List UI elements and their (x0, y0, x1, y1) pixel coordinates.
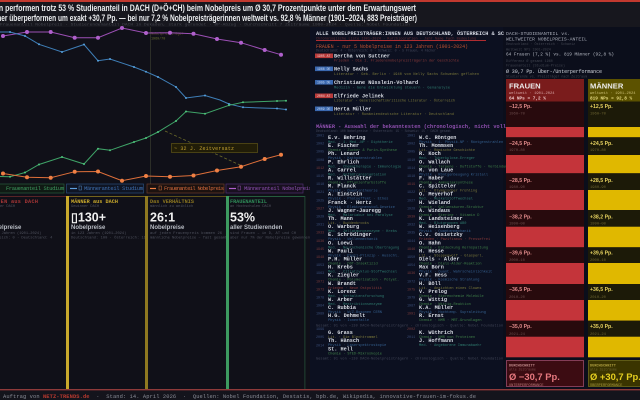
laureates: right column: 1914 (407, 167, 415, 171)
laureates: left column: M. Planck (328, 184, 356, 190)
summary: Frauen average: Ø −30,7 Pp. (509, 371, 560, 382)
series: Frauenanteil Nobelpreis (1, 153, 283, 183)
subheading: Männer counts: Deutschland: 100 Nobelpreise · Österreich: 15 · Schweiz: 15 · DACH gesamt (316, 129, 451, 133)
card: Frauenanteil: an Hochschulen DACH (230, 204, 271, 209)
column: Männer: +36,5 Pp. (590, 287, 613, 293)
laureates: left column: 1984 (316, 305, 324, 309)
laureates: right column: H. Böll (419, 281, 441, 287)
column: Männer: 2021–24 (590, 333, 607, 337)
laureates: right column: C.v. Ossietzky (419, 232, 463, 238)
title band: Männer überperformen um exakt +30,7 Pp. — bei nur 7,2 % Nobelpreisträgerinnen weltweit vs. 92,8 % Männer (1901–2024, 883 Preisträger) (0, 13, 417, 23)
laureate: Bertha von Suttner: Frieden · Die 1. Friedensnobelpreisträgerin der Geschichte (334, 58, 459, 64)
laureate: Nelly Sachs: Literatur · Geb. Berlin · 1940 von Nelly Sachs Schweden geflohen (334, 72, 479, 77)
laureates: left column: H.G. Dehmelt (328, 313, 365, 319)
laureates: right column: Chemie · Entdeckung Kernspaltung (419, 245, 488, 250)
laureates: right column: 1936 (407, 272, 415, 276)
laureates: right column: 1928 (407, 207, 415, 211)
laureates: left column: 1905 (316, 151, 324, 155)
card: Das Verhältnis: männlich zu weiblich (150, 204, 193, 209)
column: Männer: 2010–20 (590, 296, 607, 300)
laureates: right column: 1935 (407, 232, 415, 236)
column: Frauen: 1970–80 (509, 149, 526, 153)
column: Männer: +39,6 Pp. (590, 251, 613, 257)
laureates: left column: Med. · 1. Med.-NP · Diphtherie (328, 140, 393, 145)
laureates: recent men: K. Wüthrich (419, 330, 453, 336)
laureate: Christiane Nüsslein-Volhard: Christiane Nüsslein-Volhard (334, 80, 418, 86)
laureates: left column: 1948 (316, 256, 324, 260)
laureates: recent men: Chemie · STED-Mikroskopie (328, 351, 382, 356)
laureates: right column: V.F. Hess (419, 273, 447, 279)
laureates: right column: Max Born (419, 265, 444, 271)
laureates: left column: Frieden · Neue Ostpolitik (328, 286, 382, 291)
laureates: right column: Physik · Röntgenbeugung Kristall (419, 172, 488, 177)
laureates: right column: Th. Mommsen (419, 143, 453, 149)
laureates: left column: O. Loewi (328, 240, 353, 246)
heading: comparison: 64 Frauen (7,2 %) vs. 819 Männer (92,8 %) (506, 52, 614, 58)
column: Männer: 1990–00 (590, 223, 607, 227)
column: Frauen: −24,5 Pp. (509, 141, 532, 147)
column: Männer: 2000–10 (590, 259, 607, 263)
laureates: left column: Lit. · Buddenbrooks (328, 221, 369, 226)
laureates: recent men: G. Grass (328, 330, 353, 336)
card: Männer aus DACH: in 123 Jahren (1901–2024) (71, 231, 126, 236)
laureates: recent men: Chemie · NMR von Proteinen (419, 335, 475, 340)
laureates: left column: 1963 (316, 272, 324, 276)
line chart (0, 26, 309, 184)
laureates: left column: R. Willstätter (328, 176, 372, 182)
card: Frauenanteil: 53% (230, 210, 255, 224)
laureates: right column: M. von Laue (419, 167, 453, 173)
laureates: left column: Med. · Malariakur bei Paralyse (328, 213, 393, 218)
card: Frauenanteil: aller Studierenden (230, 225, 283, 231)
column: Männer (588, 79, 640, 357)
laureates: recent men: 1999 (316, 328, 324, 332)
laureates: left column: 1929 (316, 216, 324, 220)
title band (0, 0, 640, 28)
laureates: right column: H. Hesse (419, 248, 444, 254)
laureates: left column: A. Carrel (328, 167, 356, 173)
summary: Männer average (588, 360, 640, 388)
card: Das Verhältnis: 26:1 (150, 210, 175, 224)
card: Männer aus DACH: MÄNNER aus DACH (71, 198, 118, 205)
heading: comparison: Deutschland · Österreich · Schweiz (506, 42, 575, 47)
column: Frauen: −39,6 Pp. (509, 251, 532, 257)
column: Männer: +35,0 Pp. (590, 324, 613, 330)
line chart: 1960/70 (151, 36, 165, 42)
laureate: Christiane Nüsslein-Volhard: Medizin · Gene die Entwicklung steuern · Genanalyse (334, 85, 450, 90)
laureates: recent men: 2005 (316, 336, 324, 340)
laureates: left column: 1908 (316, 159, 324, 163)
laureates: right column: Chemie · Ammoniaksynthese (419, 180, 473, 186)
laureates: right column: 1932 (407, 224, 415, 228)
laureates: right column: 1991 (407, 313, 415, 317)
laureates: left column: 1945 (316, 248, 324, 252)
laureates: right column: Physik · Quant. Wahrscheinlichkeit (419, 270, 492, 275)
laureates: right column: 1918 (407, 175, 415, 179)
laureate: Herta Müller: Herta Müller (334, 107, 371, 113)
note: total count: Gesamt: 91 von ~130 DACH-Nobelpreisträgern · chronologisch · Quelle: Nobel Foundation (316, 356, 503, 362)
laureates: left column: J. Wagner-Jauregg (328, 208, 381, 214)
laureates: left column: Med. · Chemotherapie · Immunologie (328, 164, 401, 169)
heading: comparison: WELTWEITER NOBELPREIS-ANTEIL (506, 36, 587, 42)
heading: all laureates: ALLE NOBELPREISTRÄGER:INNEN AUS DEUTSCHLAND, ÖSTERREICH & SC (316, 30, 504, 37)
laureates: recent men: Physik · Laserspektroskopie (328, 343, 386, 348)
laureates: left column: Med. · Gefäßtransplantation (328, 172, 386, 177)
laureates: recent men (316, 328, 482, 356)
laureates: left column: E. Schrödinger (328, 232, 372, 238)
summary: Frauen average: alle Zeiträume (509, 368, 536, 372)
laureates: right column: H. Wieland (419, 200, 450, 206)
laureates: left column: E. Fischer (328, 143, 359, 149)
arrow: time lag (165, 131, 240, 165)
column: Frauen: −35,0 Pp. (509, 324, 532, 330)
column: Männer: +24,5 Pp. (590, 141, 613, 147)
laureates: right column: 1905 (407, 151, 415, 155)
series: Frauenanteil Studium (0, 100, 287, 178)
laureates: left column: O. Warburg (328, 224, 359, 230)
laureate: Elfriede Jelinek: Literatur · Gesellschaftskritische Literatur · Österreich (334, 99, 455, 104)
laureate: Elfriede Jelinek: Elfriede Jelinek (334, 93, 384, 99)
laureates: recent men: 2014 (316, 344, 324, 348)
panel: Laureates list (310, 27, 640, 389)
laureates: recent men: Lit. · Die Blechtrommel (328, 335, 378, 340)
footer (0, 389, 640, 400)
line chart: Nobelpreisträger (151, 32, 184, 36)
card: Das Verhältnis: männliche Nobelpreise – fast gesamt (150, 236, 227, 240)
column: Männer: 1960–70 (590, 112, 607, 116)
column: Frauen: 1960–70 (509, 112, 526, 116)
laureate: Christiane Nüsslein-Volhard: 1995 DE (317, 80, 330, 84)
laureates: left column: Med. · Citratzyklus-Stoffwechsel (328, 270, 397, 275)
laureate: Nelly Sachs: 1966 DE (317, 67, 330, 71)
laureates: right column: Physik · Hochtemp. Supraleitung (419, 310, 486, 315)
card: Frauenanteil: aber nur 7% der Nobelpreise gewonnen (230, 236, 310, 240)
laureates: right column: Frieden · Pazifismus · Pressefrei (419, 237, 490, 242)
laureates: left column: 1933 (316, 232, 324, 236)
laureates: left column: Med. · Zellatmungsenzyme · Krebs (328, 229, 397, 234)
laureates: right column: K. Landsteiner (419, 216, 463, 222)
laureates: left column: 1912 (316, 167, 324, 171)
laureates: left column: 1915 (316, 175, 324, 179)
laureates: right column: Med. · Tuberkulose-Erreger (419, 156, 475, 161)
column: Frauen: 2010–20 (509, 296, 526, 300)
laureates: right column: F. Haber (419, 176, 444, 182)
laureates: right column: Lit. · Steppenwolf · Glasperl. (419, 253, 484, 258)
summary: Männer average: alle Zeiträume (590, 368, 617, 372)
legend: Männeranteil Nobelpreis (244, 186, 312, 192)
laureates: recent men: 2002 (407, 328, 415, 332)
laureates: recent men: Med. · Angeborene Immunabwehr (419, 343, 482, 348)
heading: comparison (506, 31, 614, 78)
laureates: right column: 1919 (407, 183, 415, 187)
laureates: right column: A. Windaus (419, 208, 450, 214)
heading: comparison: Differenz Ø gesamt 1960 (506, 59, 553, 64)
summary: Frauen average (506, 360, 584, 388)
laureates: left column: 1921 (316, 191, 324, 195)
callout: Zeitversatz (172, 144, 258, 152)
series: Männeranteil Studium (0, 31, 287, 110)
laureates: left column: W. Pauli (328, 248, 353, 254)
summary: Männer average: DURCHSCHNITT (590, 364, 617, 368)
laureates: right column: 1975 (407, 288, 415, 292)
laureates: right column: Chemie · NMR · MRT-Grundlagen (419, 318, 482, 323)
laureates: right column: Chemie · Gallensäuren-Struktur (419, 205, 484, 210)
laureates: right column: Lit. · Ansichten eines Clowns (419, 286, 482, 291)
laureate: Christiane Nüsslein-Volhard (315, 80, 450, 90)
card: Männer aus DACH (66, 196, 146, 389)
subheading: Frauen counts: Deutschland: 4 · Österreich: 0 · Schweiz: 0 · 5 Frauen, 4 Fächer (316, 48, 436, 52)
laureates: right column: G. Wittig (419, 297, 447, 303)
laureates: right column: 1901 (407, 134, 415, 138)
laureates: left column: Ph. Lenard (328, 151, 359, 157)
column: Frauen: −36,5 Pp. (509, 287, 532, 293)
laureates: right column: R. Koch (419, 151, 441, 157)
laureates: right column: Physik · Kosmische Strahlung (419, 278, 479, 283)
card: Frauen aus DACH (0, 196, 66, 389)
heading: comparison: DACH-STUDIENANTEIL vs. (506, 31, 570, 37)
laureates: right column: 1979 (407, 296, 415, 300)
heading: comparison: Studierende vs. Preisträger nach Zeitraum (506, 74, 587, 78)
laureates: left column: Th. Mann (328, 216, 353, 222)
laureates: left column: Med. · Restriktionsenzyme (328, 302, 382, 307)
series: Männeranteil Nobelpreis (1, 26, 283, 57)
laureates: right column: V. Prelog (419, 289, 447, 295)
laureates: right column: Physik · Quantenmechanik (419, 229, 471, 234)
laureates: right column: Chemie · Diels-Alder-Reaktion (419, 262, 482, 266)
laureates: left column: W. Arber (328, 297, 353, 303)
laureates: right column: Med. · Blutgruppen AB0 (419, 221, 466, 226)
note: Männer total: Gesamt: 91 von ~130 DACH-Nobelpreisträgern · chronologisch · Quelle: Nobel Foundation (316, 324, 503, 328)
column: Männer: +12,5 Pp. (590, 104, 613, 110)
laureates: left column: Chemie · DDT-Insektizid (328, 262, 378, 266)
laureates: right column: Diels · Alder (419, 256, 459, 262)
laureates: recent men: St. Hell (328, 346, 353, 352)
laureates: left column: 1953 (316, 264, 324, 268)
laureates: right column: 1946 (407, 248, 415, 252)
summary: Frauen average: UNTERPERFORMANCE (509, 384, 544, 388)
legend: Frauenanteil Studium (6, 186, 64, 192)
laureates: left column: Chemie · Polymerisation · Polyet. (328, 278, 399, 283)
laureates: left column: Physik · Wellenmechanik (328, 237, 378, 242)
column: Männer: +28,5 Pp. (590, 178, 613, 184)
column: Männer: +38,2 Pp. (590, 215, 613, 221)
column: Frauen: 1990–00 (509, 223, 526, 227)
laureate: Nelly Sachs: Nelly Sachs (334, 67, 368, 73)
laureates: right column: K.A. Müller (419, 305, 453, 311)
laureates: left column: Physik · Quantentheorie (328, 189, 378, 194)
laureate: Bertha von Suttner: Bertha von Suttner (334, 53, 390, 59)
column: Frauen: 2000–10 (509, 259, 526, 263)
panel: performance comparison (506, 31, 640, 388)
laureates: left column: K. Lorenz (328, 289, 356, 295)
laureates: left column: 1971 (316, 280, 324, 284)
laureate: Bertha von Suttner (315, 53, 459, 64)
laureate: Herta Müller: 2009 DE (317, 107, 330, 111)
laureates: left column: Physik · W/Z-Bosonen CERN (328, 310, 382, 315)
footer: Auftrag von NETZ-TRENDS.de · Stand: 14. April 2026 · Quellen: Nobel Foundation, Destatis, bpb.de, Wikipedia, innovative-frauen-im-fokus.de (3, 394, 476, 400)
laureates: right column: 1927 (407, 199, 415, 203)
card: Männer aus DACH: ▯130+ (71, 210, 106, 224)
column: Frauen: 1980–90 (509, 186, 526, 190)
laureates: right column: Chemie · Terpene · Duftstoffe · Verbindungen (419, 164, 514, 169)
laureates: left column: 1927 (316, 207, 324, 211)
laureates: left column: 1973 (316, 288, 324, 292)
laureates: left column: 1978 (316, 296, 324, 300)
laureates: right column: O. Hahn (419, 240, 441, 246)
laureates: right column: C. Spitteler (419, 184, 456, 190)
column: Männer: 1980–90 (590, 186, 607, 190)
laureates: left column: Med. · Neurochemische Übertragung (328, 245, 399, 250)
laureates: right column: R. Ernst (419, 313, 444, 319)
laureates: left column: C. Rubbia (328, 305, 356, 311)
card: Das Verhältnis: Das VERHÄLTNIS (150, 198, 194, 205)
laureates: left column: Chemie · Pflanzenfarbstoffe (328, 180, 386, 186)
column: Frauen: −28,5 Pp. (509, 178, 532, 184)
legend (0, 184, 312, 193)
card: Das Verhältnis: Nobelpreise (150, 225, 185, 231)
laureates: left column: 1989 (316, 313, 324, 317)
laureates: recent men: J. Hoffmann (419, 338, 453, 344)
card: Männer aus DACH: Deutschland: 100 · Österreich: 15 (71, 236, 146, 240)
laureates: right column: O. Wallach (419, 159, 450, 165)
laureates: left column: 1902 (316, 143, 324, 147)
column: Frauen: 64 NPs = 7,2 % (509, 96, 546, 102)
summary: Frauen average: DURCHSCHNITT (509, 364, 536, 368)
laureates: left column: 1936 (316, 240, 324, 244)
laureate: Elfriede Jelinek: 2004 AT (317, 94, 330, 98)
laureates: recent men: 2011 (407, 336, 415, 340)
laureates: right column: W. Heisenberg (419, 224, 459, 230)
laureates: left column: Physik · Pauli-Prinzip · Ausschl. (328, 253, 399, 258)
legend: Männeranteil Studium (84, 186, 143, 192)
laureate: Bertha von Suttner: 1905 AT (317, 54, 330, 58)
laureates: right column: 1910 (407, 159, 415, 163)
laureates: right column: 1930 (407, 216, 415, 220)
column: Frauen: FRAUEN (509, 82, 541, 90)
laureates: left column: Franck · Hertz (328, 200, 372, 206)
column: Frauen: −38,2 Pp. (509, 215, 532, 221)
legend: Frauenanteil Nobelpreis (164, 186, 224, 192)
laureates: left column: Physik · Ionenfalle (328, 318, 369, 323)
laureates: left column: K. Ziegler (328, 273, 359, 279)
laureate: Elfriede Jelinek (315, 93, 455, 104)
card: Das Verhältnis (145, 196, 227, 389)
laureates: left column: Physik · Photoeffekt · Ethos (328, 197, 388, 202)
laureates: right column: 1950 (407, 256, 415, 260)
laureates: left column: 1931 (316, 224, 324, 228)
laureates: left column: H. Krebs (328, 265, 353, 271)
laureates: left column: 1918 (316, 183, 324, 187)
laureates: left column: W. Brandt (328, 281, 356, 287)
laureates: right column: 1902 (407, 143, 415, 147)
callout: Zeitversatz: ~ 32 J. Zeitversatz (174, 146, 234, 152)
card: Das Verhältnis: auf jeden Frauenpreis kommen 26 (150, 231, 222, 236)
summary: Männer average: Ø +30,7 Pp. (590, 371, 640, 382)
laureates: right column: Lit. · Olympischer Frühling (419, 189, 477, 194)
heading: comparison: Ø 30,7 Pp. Über-/Unterperformance (506, 68, 602, 75)
laureates: right column: 1954 (407, 264, 415, 268)
laureates: right column: 1972 (407, 280, 415, 284)
card: Männer aus DACH: Nobelpreise (71, 225, 106, 231)
column: Frauen (506, 79, 584, 357)
column: Männer: 1970–80 (590, 149, 607, 153)
laureates: left column: Med. · Verhaltensforschung (328, 294, 384, 299)
laureates: left column: Physik · Elektronenstoß-Gesetze (328, 205, 395, 210)
laureates: right column: 1944 (407, 240, 415, 244)
laureates: left column: 1925 (316, 199, 324, 203)
laureates: left column (316, 134, 401, 323)
laureate: Herta Müller (315, 106, 454, 117)
card: Frauenanteil: FRAUENANTEIL (230, 199, 267, 205)
laureates: right column: O. Meyerhof (419, 192, 453, 198)
laureates: right column: W.C. Röntgen (419, 135, 456, 141)
laureates: left column: 1901 (316, 134, 324, 138)
heading: Männer: MÄNNER - Auswahl der bekanntesten (chronologisch, nicht voll (316, 123, 506, 130)
laureates: left column: A. Einstein (328, 192, 362, 198)
card: Männer aus DACH: Gewinner DACH (71, 204, 99, 209)
laureates: right column: Chemie · Wittig-Reaktion (419, 302, 471, 307)
laureates: right column: Med. · Muskelstoffwechsel (419, 197, 473, 202)
laureates: recent men: Th. Hänsch (328, 338, 359, 344)
column: Männer: weltweit · 1901–2024 (590, 91, 636, 96)
laureate: Herta Müller: Literatur · Rumäniendeutsche Literatur · Deutschland (334, 112, 454, 117)
laureates: right column: 1987 (407, 305, 415, 309)
card: Frauenanteil: sind Frauen – in D, AT und CH (230, 231, 296, 236)
title band: Frauenanteil Nobelpreis · Studierendenanteil DACH in Dekaden, stark gerundet · ØP-Abzug · Durchschnitt 7 Zeiträume 1960–2024 · Quelle: Nobel Foundation (0, 23, 410, 28)
laureates: right column: 1922 (407, 191, 415, 195)
laureates: right column (407, 134, 514, 323)
laureates: left column: Physik · Kathodenstrahlen (328, 156, 382, 161)
subheading: chronological list: Chronologische Liste 1901–2024 · Kurzbiografien · Jahr Name Fach Bedeutung (316, 36, 476, 41)
column: Männer: MÄNNER (590, 82, 624, 90)
column: Frauen: weltweit · 1901–2024 (509, 91, 555, 96)
laureates: left column: P.H. Müller (328, 256, 362, 262)
heading: comparison: Weltweit NPs 1901–2024 (506, 48, 551, 52)
heading: Frauen: FRAUEN - nur 5 Nobelpreise in 123 Jahren (1901–2024) (316, 44, 468, 50)
column: Frauen: 2021–24 (509, 333, 526, 337)
heading: comparison: Frauenanteil (Studium-Preise) (506, 64, 565, 68)
laureates: right column: Physik · 1. Physik-NP · Röntgenstrahlen (419, 140, 503, 145)
column: Männer: 819 NPs = 92,8 % (590, 96, 633, 102)
laureates: left column: Chemie · Zucker & Purin-Synthese (328, 148, 397, 153)
laureates: right column: Lit. · Römische Geschichte (419, 148, 475, 153)
laureates: right column: Chemie · Stereochemie Moleküle (419, 294, 484, 299)
card: Frauenanteil (226, 196, 310, 389)
laureates: left column: E.v. Behring (328, 135, 365, 141)
laureates: left column: P. Ehrlich (328, 159, 359, 165)
summary: Männer average: ÜBERPERFORMANCE (590, 383, 622, 388)
laureate: Nelly Sachs (315, 66, 479, 77)
laureates: right column: Chemie · Sterine · Vitamin D (419, 213, 479, 218)
column: Frauen: −12,5 Pp. (509, 104, 532, 110)
